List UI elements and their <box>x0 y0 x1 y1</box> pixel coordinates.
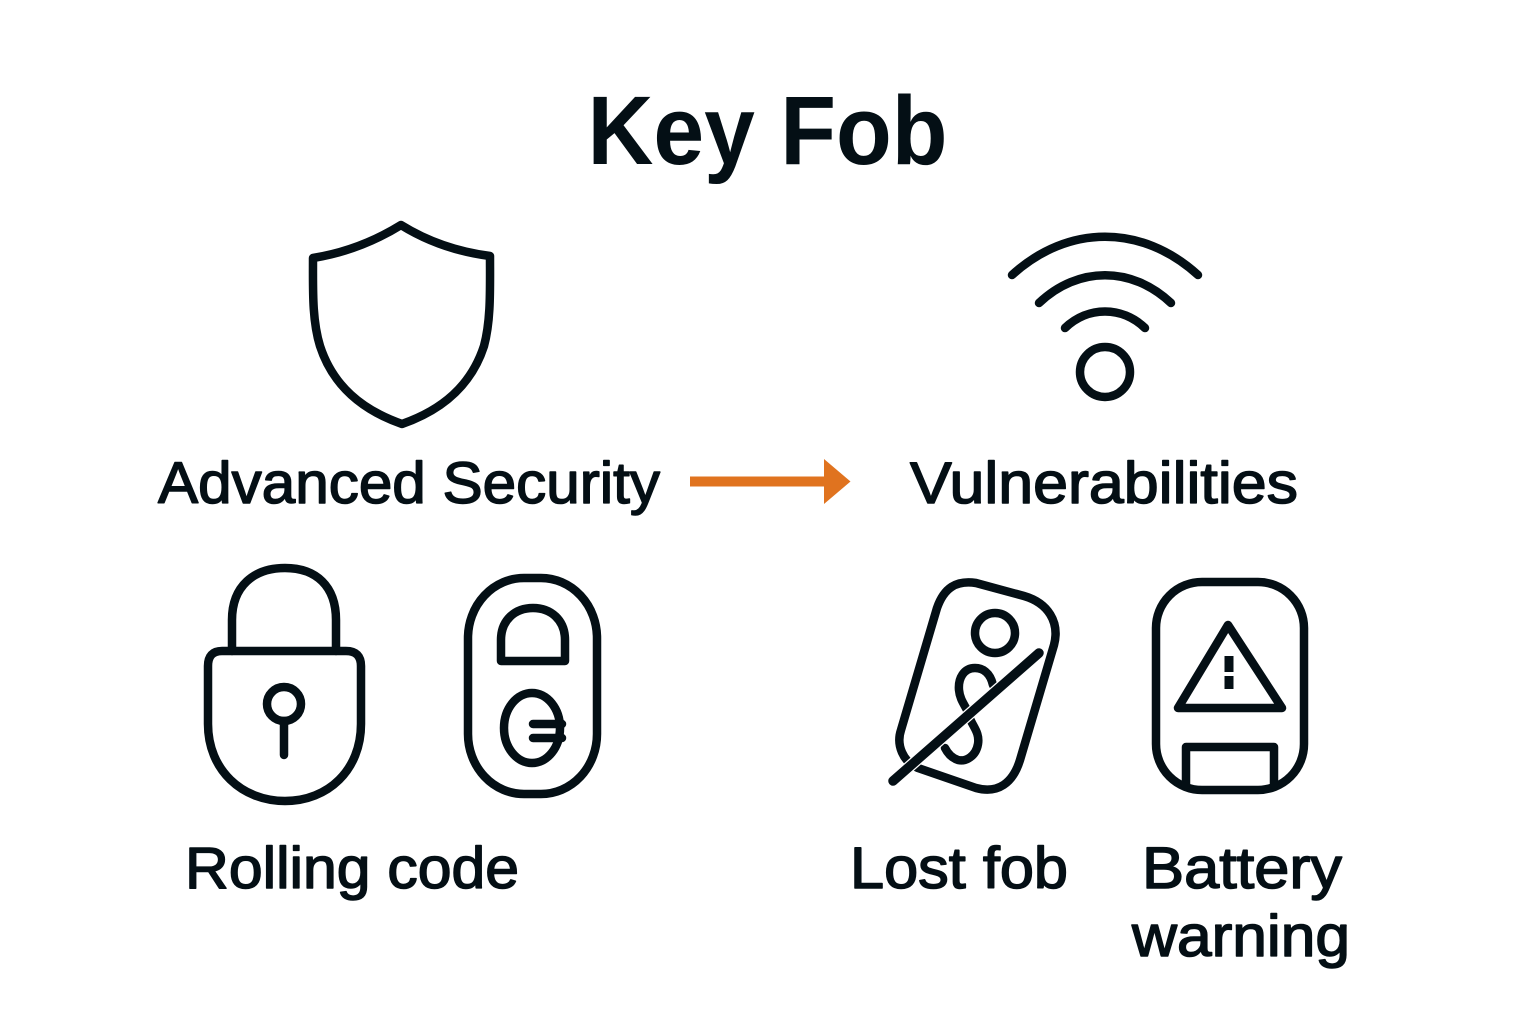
heading: Advanced Security: Advanced Security <box>158 451 660 516</box>
icon: lost fob crossed out <box>893 582 1056 790</box>
icon: key fob with lock and buttons <box>468 578 597 794</box>
label: Battery warning <box>1131 836 1350 969</box>
icon: padlock <box>208 568 361 801</box>
icon: battery warning <box>1156 582 1304 790</box>
label: Battery warning: Battery <box>1142 836 1342 901</box>
label: Battery warning: warning <box>1131 904 1350 969</box>
label: Lost fob: Lost fob <box>850 836 1068 901</box>
heading: Vulnerabilities: Vulnerabilities <box>910 451 1298 516</box>
title: Key Fob <box>588 76 948 185</box>
label: Rolling code: Rolling code <box>185 836 519 901</box>
icon: shield <box>313 225 490 424</box>
arrow <box>690 459 850 504</box>
icon: wifi signal <box>1012 237 1198 397</box>
